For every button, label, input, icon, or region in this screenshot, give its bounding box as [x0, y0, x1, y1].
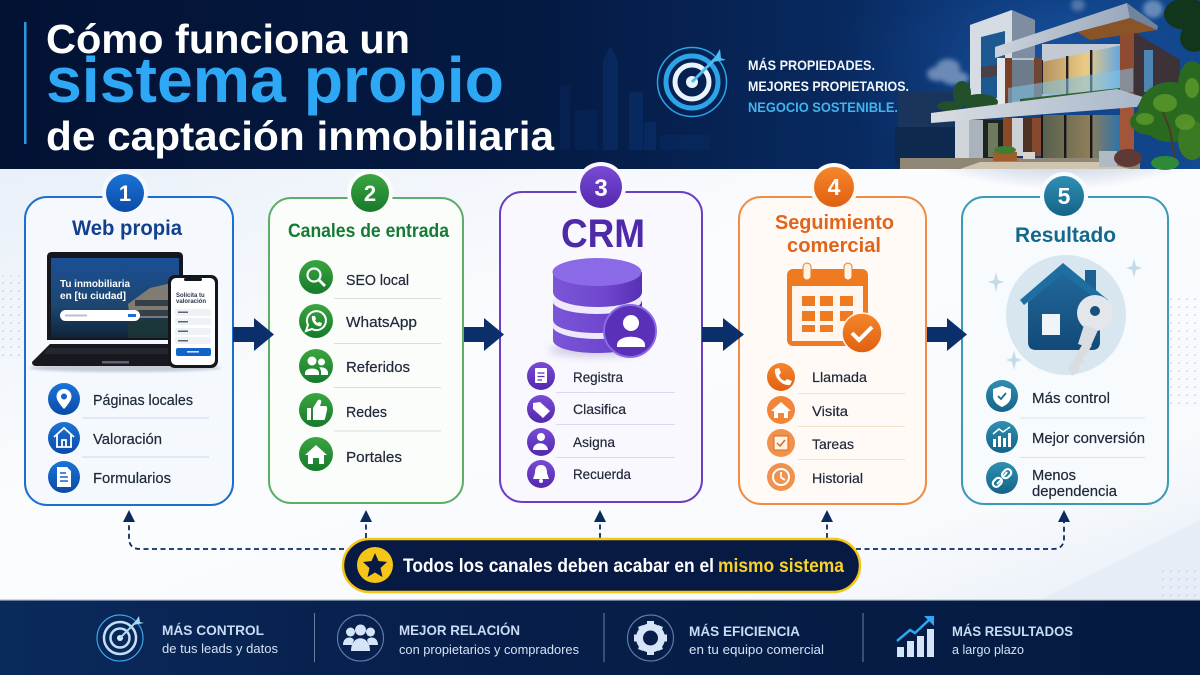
- item: Clasifica: Clasifica: [573, 401, 626, 417]
- tagline: MEJORES PROPIETARIOS.: [748, 78, 909, 94]
- item: Más control: Más control: [1032, 390, 1110, 407]
- arrow: step 4 to 5: [927, 318, 967, 351]
- step badge 4: 4: [828, 174, 841, 200]
- arrow: step 1 to 2: [233, 318, 274, 351]
- panel: Canales de entrada: [269, 170, 463, 503]
- item: SEO local: [299, 260, 409, 294]
- list: follow-up: [767, 363, 905, 491]
- tagline: [748, 57, 909, 115]
- benefit: más eficiencia: MÁS EFICIENCIA: [689, 623, 800, 639]
- item: Redes: Redes: [346, 404, 387, 421]
- item: WhatsApp: WhatsApp: [346, 314, 417, 331]
- title: sistema propio: [46, 44, 504, 116]
- item: Referidos: Referidos: [346, 359, 410, 376]
- benefit: más eficiencia: en tu equipo comercial: [689, 643, 824, 657]
- heading: CRM: [561, 212, 645, 256]
- arrow: step 2 to 3: [464, 318, 504, 351]
- callout: mismo sistema: Todos los canales deben acabar en el: [403, 555, 714, 577]
- icon: database with user: [549, 258, 656, 357]
- callout: mismo sistema: [343, 539, 860, 592]
- list: Web propia: [48, 383, 209, 493]
- step badge 1: 1: [119, 181, 131, 206]
- item: Mejor conversión: [986, 421, 1145, 453]
- heading: [775, 212, 894, 257]
- item: Páginas locales: Páginas locales: [93, 392, 193, 409]
- icon: calendar with check: [787, 263, 882, 353]
- list: results: [986, 380, 1145, 500]
- benefit: más control: de tus leads y datos: [162, 642, 278, 656]
- title: de captación inmobiliaria: [46, 113, 555, 159]
- title accent bar: [24, 22, 26, 144]
- laptop and phone mockup: Solicita tu: [176, 293, 205, 299]
- item: Menos dependencia: [986, 462, 1118, 500]
- arrow: step 3 to 4: [702, 318, 744, 351]
- step badge 4: [810, 163, 858, 211]
- step badge 5: [1040, 172, 1088, 220]
- panel: CRM: [500, 162, 702, 502]
- heading: comercial: [787, 235, 881, 257]
- footer band: [0, 599, 1200, 675]
- item: Páginas locales: [48, 383, 193, 415]
- benefit: mejor relación: [338, 615, 579, 661]
- item: Menos dependencia: dependencia: [1032, 483, 1118, 500]
- icon: star: [357, 547, 393, 583]
- panel: Resultado: [962, 172, 1168, 504]
- item: Valoración: Valoración: [93, 431, 162, 448]
- benefit: más resultados: [897, 616, 1073, 657]
- step badge 1: [102, 170, 148, 216]
- icon: house with key: [988, 255, 1142, 376]
- item: WhatsApp: [299, 304, 417, 338]
- item: Formularios: Formularios: [93, 470, 171, 487]
- item: Recuerda: [527, 460, 631, 488]
- item: Menos dependencia: Menos: [1032, 467, 1076, 484]
- item: Historial: Historial: [812, 470, 863, 486]
- step badge 5: 5: [1058, 183, 1071, 209]
- tagline: MÁS PROPIEDADES.: [748, 57, 875, 73]
- item: Más control: [986, 380, 1110, 412]
- icon: target: [658, 48, 726, 116]
- benefit: más control: MÁS CONTROL: [162, 622, 264, 638]
- benefit: más control: [97, 615, 278, 661]
- laptop and phone mockup: [29, 252, 221, 372]
- step badge 2: [347, 170, 393, 216]
- item: Valoración: [48, 422, 162, 454]
- heading: Canales de entrada: [288, 221, 449, 242]
- heading: Web propia: [72, 217, 182, 240]
- list: CRM actions: [527, 362, 675, 488]
- item: Referidos: [299, 349, 410, 383]
- laptop and phone mockup: valoración: [176, 299, 206, 305]
- heading: Seguimiento: [775, 212, 894, 234]
- item: SEO local: SEO local: [346, 272, 409, 289]
- panel: Web propia: [25, 170, 233, 505]
- body background: [0, 168, 1200, 602]
- item: Asigna: Asigna: [573, 434, 615, 450]
- item: Asigna: [527, 428, 615, 456]
- tagline: NEGOCIO SOSTENIBLE.: [748, 99, 898, 115]
- step badge 2: 2: [364, 181, 376, 206]
- step badge 3: 3: [594, 175, 608, 202]
- item: Recuerda: Recuerda: [573, 466, 631, 482]
- step badge 3: [576, 162, 626, 212]
- item: Clasifica: [527, 395, 626, 423]
- laptop and phone mockup: en [tu ciudad]: [60, 290, 126, 302]
- header band: [0, 0, 1200, 190]
- panel: Seguimiento comercial: [739, 163, 926, 504]
- heading: Resultado: [1015, 224, 1116, 247]
- item: Formularios: [48, 461, 171, 493]
- city skyline: [560, 46, 710, 150]
- benefit: más eficiencia: [628, 615, 824, 661]
- title: [46, 16, 555, 159]
- item: Visita: Visita: [812, 403, 848, 419]
- house photo illustration: [895, 0, 1200, 170]
- dashed connectors to panels: [123, 510, 1070, 549]
- item: Registra: [527, 362, 623, 390]
- benefit: mejor relación: MEJOR RELACIÓN: [399, 621, 520, 638]
- benefit: mejor relación: con propietarios y compradores: [399, 643, 579, 657]
- item: Portales: [299, 437, 402, 471]
- item: Llamada: Llamada: [812, 369, 867, 385]
- item: Redes: [299, 393, 387, 427]
- benefit: más resultados: a largo plazo: [952, 643, 1024, 657]
- item: Registra: Registra: [573, 369, 623, 385]
- laptop and phone mockup: Tu inmobiliaria: [60, 278, 130, 290]
- item: Tareas: Tareas: [812, 436, 854, 452]
- title: Cómo funciona un: [46, 16, 410, 62]
- benefit: más resultados: MÁS RESULTADOS: [952, 623, 1073, 639]
- item: Portales: Portales: [346, 449, 402, 466]
- item: Mejor conversión: Mejor conversión: [1032, 430, 1145, 447]
- callout: mismo sistema: mismo sistema: [718, 555, 844, 577]
- list: channels: [299, 260, 441, 471]
